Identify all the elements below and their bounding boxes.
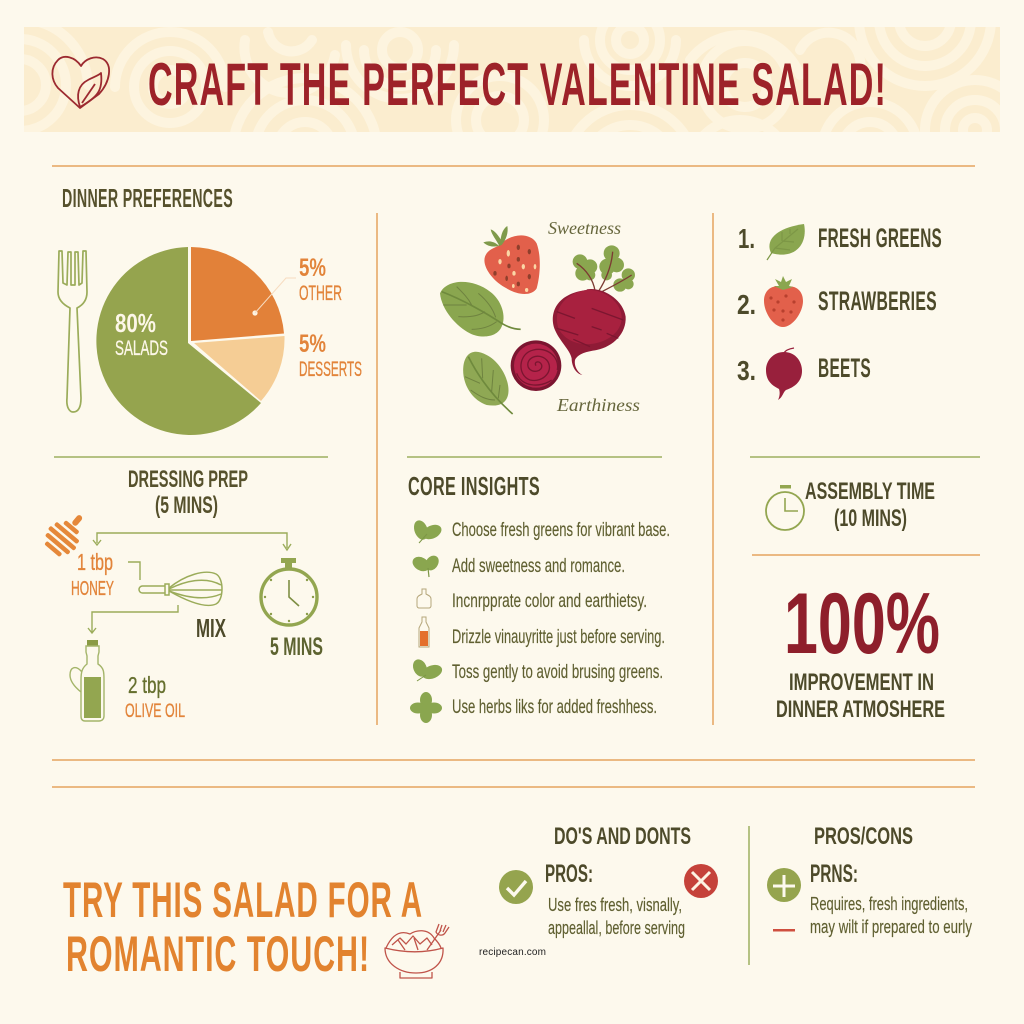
label: mix: MIX (196, 613, 226, 643)
label: assembly time (805, 478, 935, 532)
text: do's: Use fres fresh, visnally, (548, 894, 682, 915)
item 1: fresh greens: 1. (738, 223, 755, 254)
stat number: 100% (784, 576, 940, 672)
label: honey (71, 549, 114, 600)
insight 1 (411, 518, 670, 543)
stat caption: IMPROVEMENT IN (789, 669, 934, 696)
pie label: salads: 80% (115, 308, 156, 338)
pie label: desserts: DESSERTS (299, 358, 362, 381)
heading: do's and donts: DO'S AND DONTS (554, 823, 691, 850)
stat caption (776, 669, 945, 723)
panel: big stat (776, 576, 945, 723)
icon: plus (767, 868, 801, 902)
header banner (24, 27, 1000, 132)
insight 2 (410, 553, 625, 577)
icon: timer (766, 485, 804, 530)
watermark: recipecan.com (479, 947, 546, 958)
insight 6: Use herbs liks for added freshhess. (452, 696, 657, 718)
icon: stopwatch (261, 558, 317, 625)
icon: salad bowl (385, 924, 449, 978)
panel: ingredients list (737, 223, 942, 400)
item 3: beets: BEETS (818, 353, 871, 383)
text: do's: appeallal, before serving (548, 917, 685, 938)
flow arrows (88, 533, 291, 633)
icon: cross (684, 864, 718, 898)
insight 2: Add sweetness and romance. (452, 555, 625, 577)
pie chart (96, 247, 296, 435)
heading: dressing prep: DRESSING PREP (128, 466, 248, 493)
pie label: salads (115, 308, 168, 360)
icon: check (499, 870, 533, 904)
panel: dinner preferences (58, 183, 362, 435)
insight 3: Incnrpprate color and earthietsy. (452, 590, 647, 612)
pie label: other: 5% (299, 254, 326, 282)
icon: fork (58, 251, 87, 412)
panel: pros and cons (767, 823, 973, 937)
panel: core insights (408, 471, 670, 723)
panel: assembly time (766, 478, 935, 532)
item 2: strawberries: 2. (737, 289, 756, 320)
text: cons (810, 893, 973, 937)
label: pros: PROS: (545, 860, 593, 888)
divider lines (52, 166, 980, 965)
insight 3 (417, 589, 647, 612)
item 1: fresh greens (738, 223, 942, 260)
illustration: ingredients (440, 226, 635, 414)
panel: do's and donts (499, 823, 718, 938)
icon: olive oil bottle (70, 640, 104, 721)
icon: honey dipper (39, 505, 94, 562)
call to action (63, 872, 423, 982)
insight 4 (419, 617, 665, 648)
icon: heart with leaf (52, 57, 109, 108)
insight 6 (410, 692, 657, 723)
label: assembly time: (10 MINS) (834, 505, 907, 532)
label: 5 mins: 5 MINS (270, 633, 323, 661)
item 3: beets (737, 348, 871, 400)
heading: dressing prep: (5 MINS) (155, 492, 218, 519)
label: olive oil: 2 tbp (128, 672, 166, 698)
insight 5 (410, 657, 663, 683)
item 2: strawberries (737, 276, 937, 327)
label: earthiness: Earthiness (556, 395, 640, 415)
icon: minus (773, 929, 795, 932)
label: honey: HONEY (71, 578, 114, 600)
label: prns: PRNS: (810, 860, 858, 888)
label: olive oil: OLIVE OIL (125, 701, 185, 722)
label: sweetness: Sweetness (548, 218, 621, 238)
heading: dressing prep (128, 466, 248, 519)
item 3: beets: 3. (737, 355, 756, 386)
pie label: desserts: 5% (299, 330, 326, 358)
insight 4: Drizzle vinauyritte just before serving. (452, 626, 665, 648)
label: honey: 1 tbp (77, 549, 113, 575)
stat caption: DINNER ATMOSHERE (776, 696, 945, 723)
insight 5: Toss gently to avoid brusing greens. (452, 661, 663, 683)
heading: dinner preferences: DINNER PREFERENCES (62, 183, 233, 213)
heading: pros/cons: PROS/CONS (814, 823, 913, 850)
panel: ingredient illustration (440, 218, 640, 415)
insight 1: Choose fresh greens for vibrant base. (452, 519, 670, 541)
icon: whisk (139, 572, 222, 605)
pie label: desserts (299, 330, 362, 381)
pie label: other: OTHER (299, 282, 342, 305)
heading: core insights: CORE INSIGHTS (408, 471, 540, 501)
item 2: strawberries: STRAWBERIES (818, 286, 937, 316)
panel: dressing prep (39, 466, 323, 722)
call to action: TRY THIS SALAD FOR A (63, 872, 423, 928)
call to action: ROMANTIC TOUCH! (66, 926, 370, 982)
text: do's (548, 894, 685, 938)
pie label: salads: SALADS (115, 337, 168, 360)
pie label: other (299, 254, 342, 305)
label: assembly time: ASSEMBLY TIME (805, 478, 935, 505)
label: olive oil (125, 672, 185, 722)
